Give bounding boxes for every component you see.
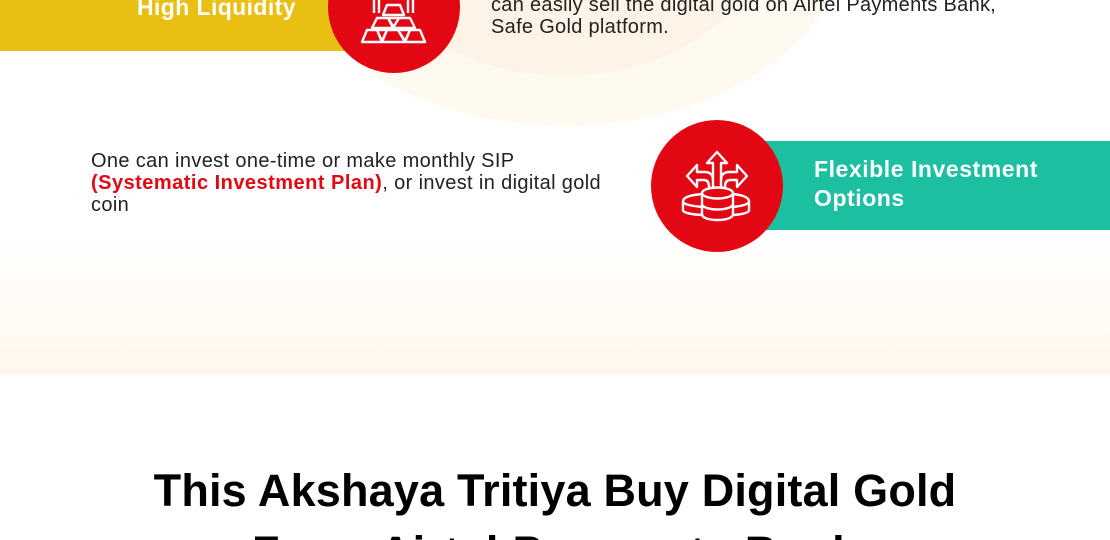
bottom cream gradient background <box>0 235 1110 375</box>
text: sell digital gold <box>491 0 996 38</box>
label: Flexible Investment Options: Options <box>814 185 905 211</box>
text: investment options: coin <box>91 194 129 216</box>
yellow band: High Liquidity <box>0 0 350 51</box>
icon: arrows over coins in red circle <box>651 120 783 252</box>
heading <box>154 465 956 540</box>
label: Flexible Investment Options <box>814 156 1038 211</box>
icon: gold bars in red circle <box>328 0 460 73</box>
text: investment options: One can invest one-time or make monthly SIP <box>91 150 514 172</box>
text: investment options <box>91 150 601 216</box>
text: investment options: (Systematic Investment Plan), or invest in digital gold <box>91 172 601 194</box>
teal band: Flexible Investment Options <box>740 141 1110 230</box>
label: Flexible Investment Options: Flexible Investment <box>814 156 1038 182</box>
heading: This Akshaya Tritiya Buy Digital Gold <box>154 465 956 516</box>
decorative cream glow ellipses <box>343 0 828 126</box>
text: sell digital gold: Safe Gold platform. <box>491 16 669 38</box>
